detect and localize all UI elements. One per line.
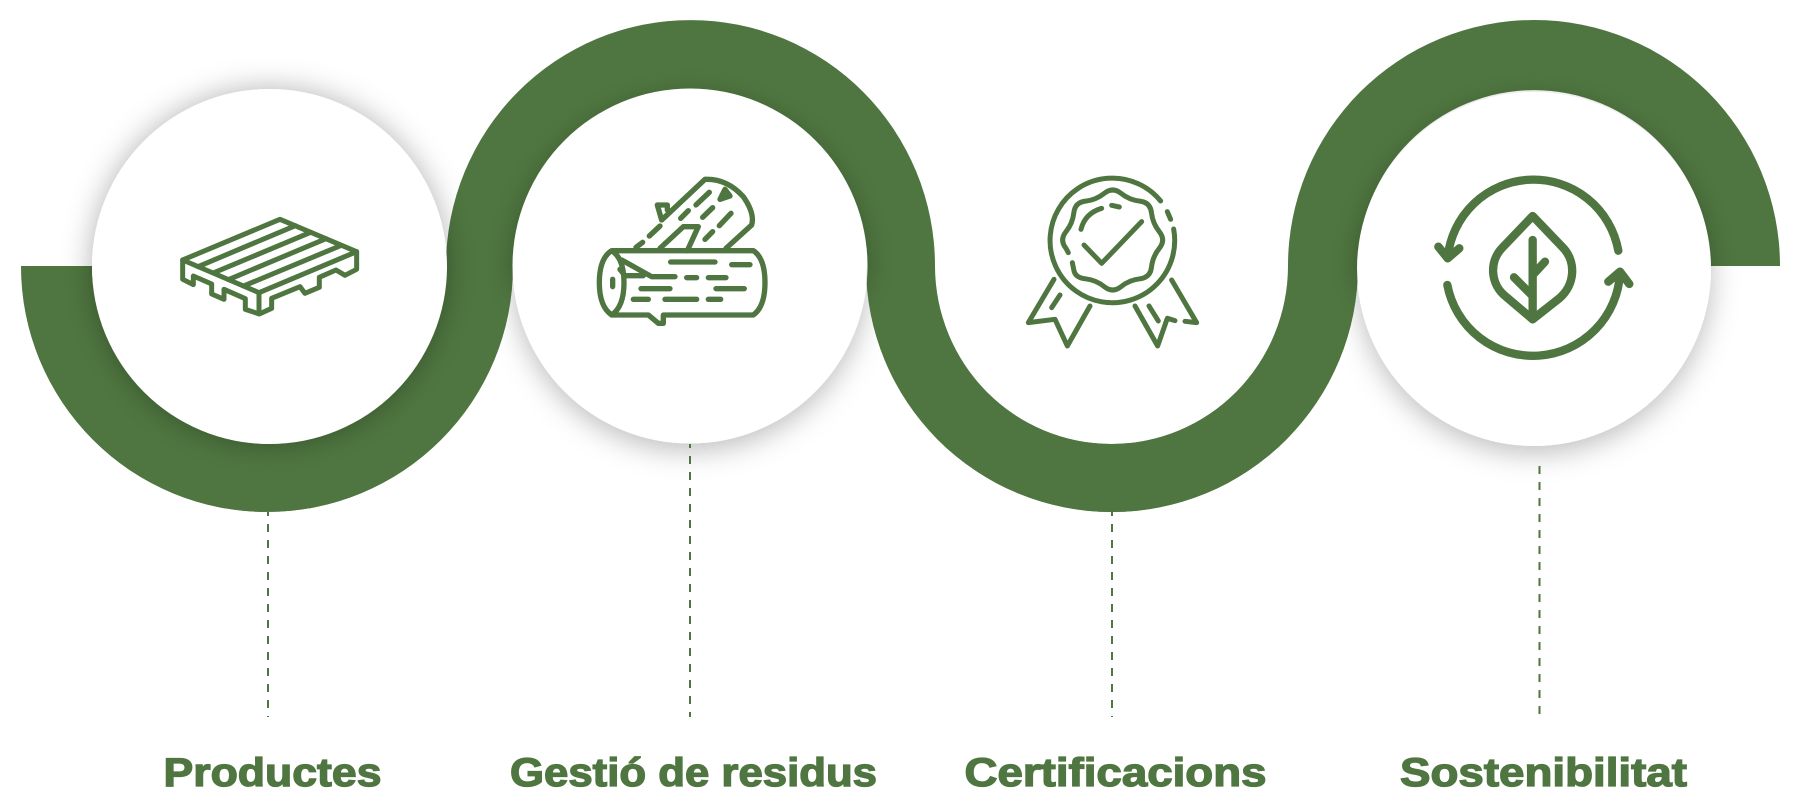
wave segment 1: [21, 266, 513, 512]
icon: leaf with cycle arrows: [1438, 180, 1629, 356]
label: Certificacions: Certificacions: [964, 751, 1266, 795]
dashed connector 3: [1111, 512, 1113, 717]
wave segment 3: [866, 266, 1358, 512]
label: Gestió de residus: Gestió de residus: [510, 751, 877, 795]
dashed connector 4: [1538, 466, 1540, 717]
label: Sostenibilitat: Sostenibilitat: [1400, 751, 1687, 795]
circle 2: [512, 88, 868, 444]
icon: certification badge: [1028, 178, 1197, 346]
icon: pallet: [183, 219, 357, 314]
icon: logs: [599, 179, 765, 323]
dashed connector 2: [689, 444, 691, 717]
wave segment 2: [446, 20, 935, 266]
dashed connector 1: [267, 512, 269, 717]
label: Productes: Productes: [164, 751, 382, 795]
circle 1: [92, 89, 447, 444]
wave segment 4: [1288, 20, 1780, 266]
circle 4: [1357, 92, 1711, 446]
